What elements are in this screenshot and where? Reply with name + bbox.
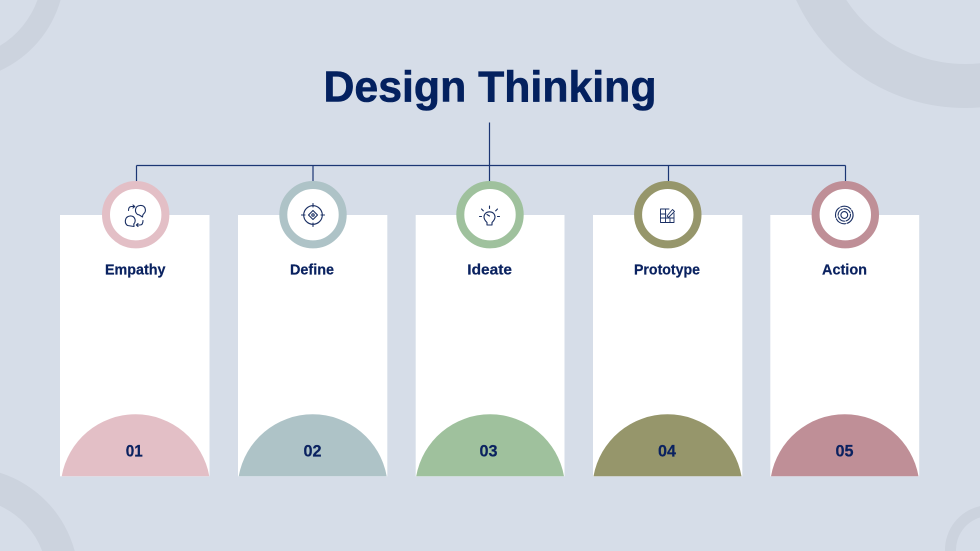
semicircle [771, 414, 918, 476]
title: Design Thinking [324, 63, 656, 112]
card [60, 215, 210, 476]
semicircle [594, 414, 742, 476]
decorative ring: top right [796, 0, 980, 108]
icon: two heads exchanging ideas [125, 205, 145, 226]
semicircle [416, 414, 564, 476]
number: 03 [480, 442, 498, 461]
semicircle [62, 414, 209, 476]
semicircle [239, 414, 387, 476]
number: 02 [304, 442, 322, 461]
decorative ring: top left [0, 0, 61, 71]
panel: Action [770, 185, 919, 476]
ring [638, 185, 698, 244]
label: Action [822, 262, 867, 278]
label: Prototype [634, 262, 700, 278]
icon: target [302, 204, 324, 226]
label: Define [290, 262, 334, 278]
connector lines [136, 122, 846, 182]
number: 04 [658, 442, 677, 461]
panel: Prototype [593, 185, 742, 476]
card [416, 215, 564, 476]
ring [460, 185, 520, 244]
decorative ring: bottom right [945, 506, 980, 551]
label: Ideate [467, 262, 512, 278]
card [593, 215, 742, 476]
number: 01 [126, 442, 143, 461]
ring [816, 185, 875, 244]
ring [283, 185, 343, 244]
icon: concentric target rings [836, 206, 853, 224]
panel: Empathy [60, 185, 210, 476]
card [770, 215, 919, 476]
number: 05 [836, 442, 854, 461]
card [238, 215, 387, 476]
ring [106, 185, 165, 244]
panel: Ideate [416, 185, 564, 476]
label: Empathy [105, 262, 166, 278]
panel: Define [238, 185, 387, 476]
icon: light bulb [480, 206, 500, 225]
decorative ring: bottom left [0, 473, 75, 551]
icon: prototype grid with pencil [660, 209, 674, 222]
